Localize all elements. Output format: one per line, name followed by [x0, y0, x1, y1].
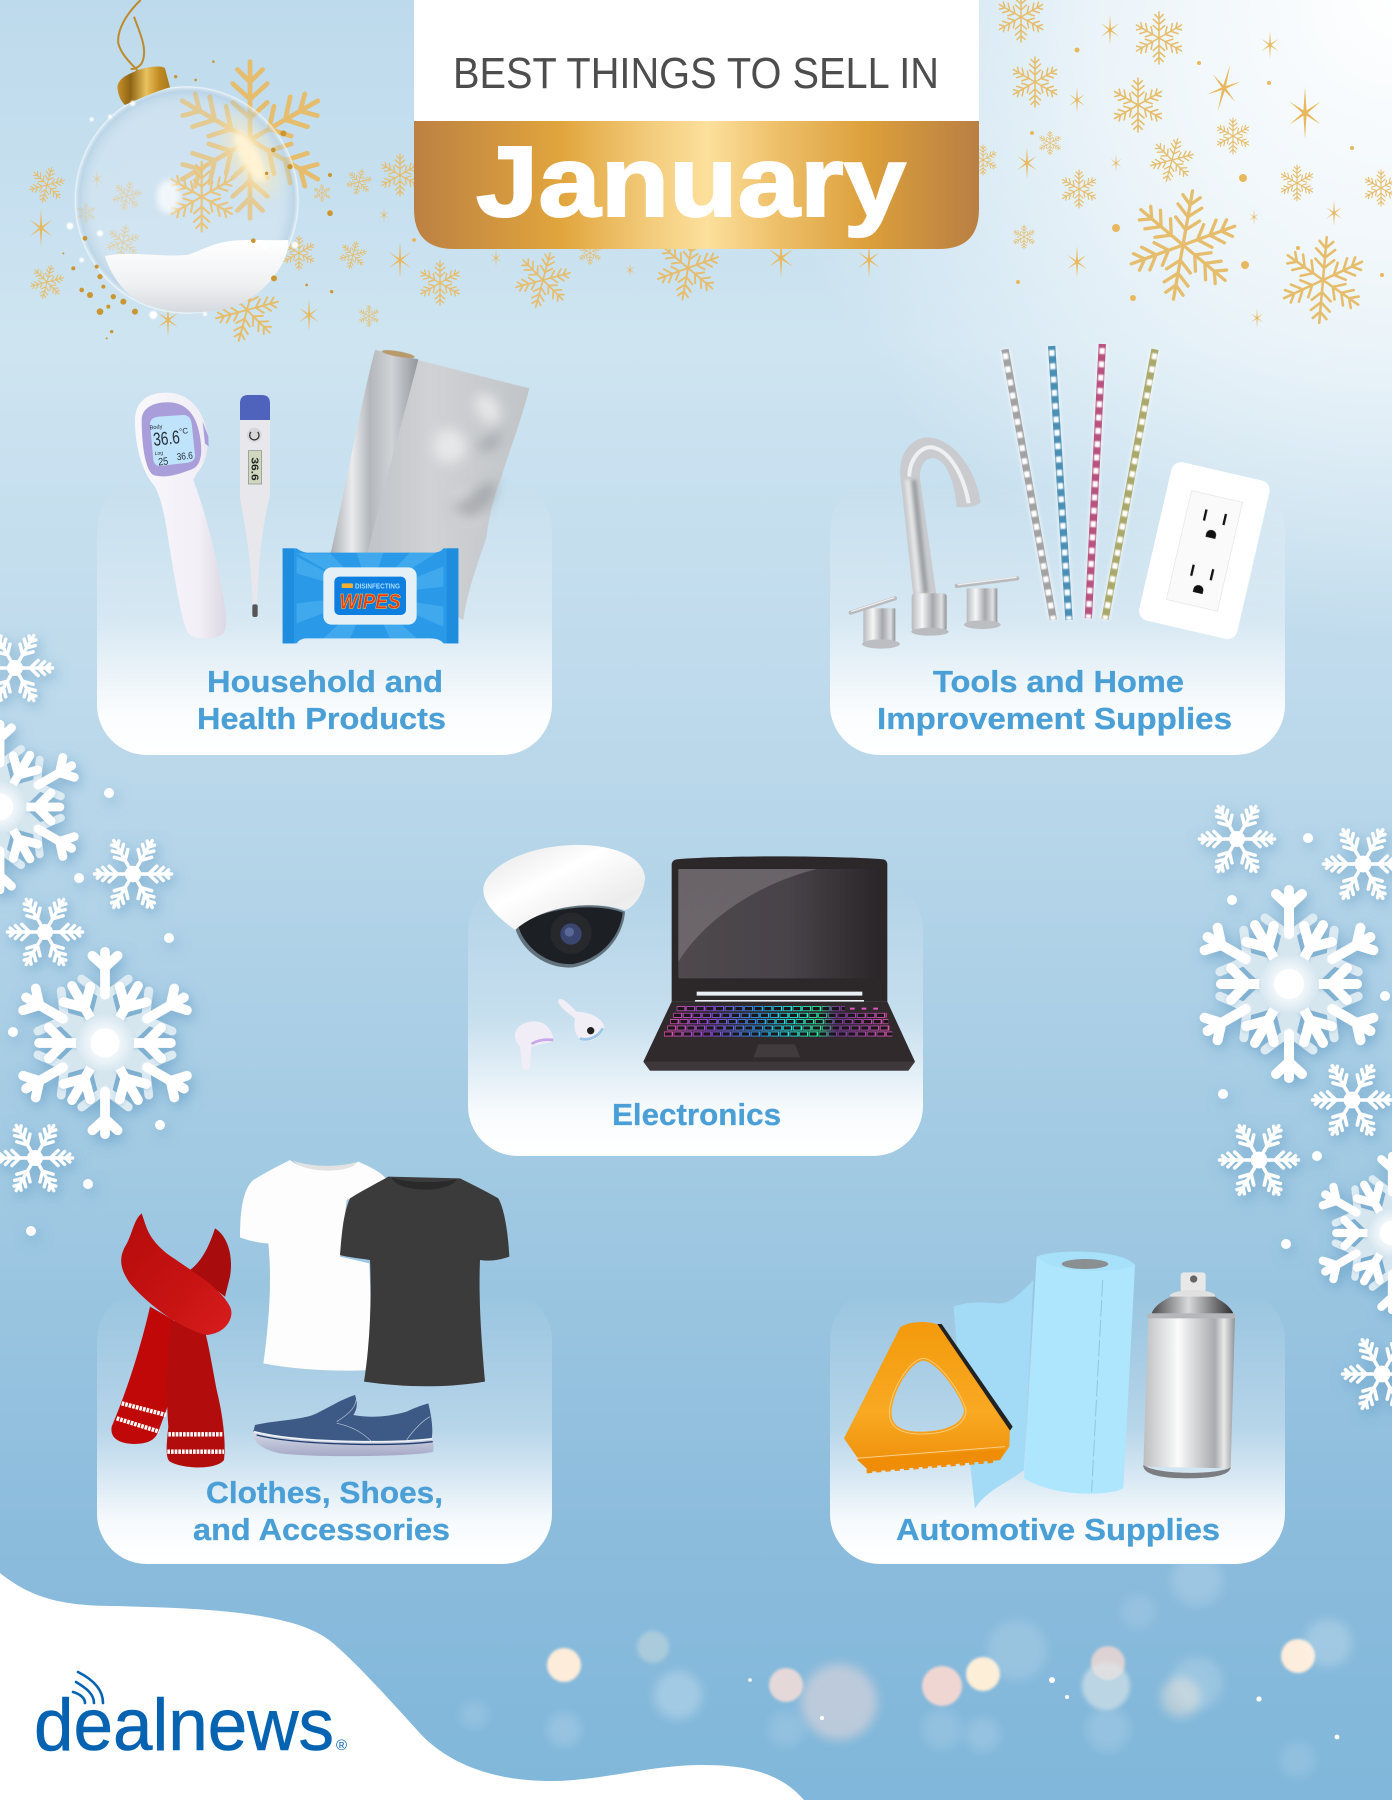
icon: disinfecting wipes pack: [283, 548, 458, 643]
bauble ornament: [62, 0, 333, 339]
icon: infrared thermometer: 25: [158, 456, 169, 468]
product images: [111, 1160, 509, 1467]
icon: black t-shirt: [340, 1177, 509, 1386]
gold confetti: [62, 60, 333, 339]
icon: laptop: [643, 856, 915, 1071]
icon: infrared thermometer: Body: [149, 424, 163, 432]
icon: digital thermometer: 36.6: [249, 457, 260, 481]
label: Health Products: [197, 701, 446, 736]
panel: tools and home improvement supplies: [830, 344, 1285, 755]
icon: infrared thermometer: [135, 393, 226, 639]
product images: [135, 348, 529, 643]
panel: clothes shoes and accessories: [97, 1160, 552, 1564]
icon: faucet: [851, 437, 1017, 649]
product images: [851, 344, 1272, 649]
label: Improvement Supplies: [877, 701, 1232, 736]
panel: electronics: [468, 845, 923, 1156]
label: Household and: [207, 664, 443, 699]
white wave: [0, 1573, 804, 1800]
right snowflakes: [1196, 803, 1392, 1412]
ornament ribbon: [118, 0, 144, 71]
icon: ice scraper: [844, 1322, 1013, 1472]
label: Tools and Home: [933, 664, 1184, 699]
glass globe: [75, 87, 298, 313]
icon: infrared thermometer: Log: [154, 450, 164, 457]
icon: slip-on shoe: [253, 1395, 433, 1456]
signal arcs: [73, 1672, 103, 1703]
icon: digital thermometer: [240, 395, 270, 617]
icon: LED light strips: [1005, 344, 1155, 620]
panel: household and health products: [97, 348, 552, 755]
icon: disinfecting wipes pack: WIPES: [339, 590, 401, 614]
month title: January: [476, 126, 906, 238]
product images: [844, 1252, 1235, 1508]
label: Clothes, Shoes,: [206, 1475, 443, 1510]
icon: paper towel roll: [953, 1252, 1135, 1508]
gold snowflakes and stars: [25, 0, 1392, 349]
registered mark: ®: [336, 1737, 347, 1754]
icon: security camera: [483, 845, 645, 968]
label: Automotive Supplies: [896, 1512, 1220, 1547]
icon: foil roll: [330, 348, 529, 620]
icon: wireless earbuds: [515, 999, 604, 1070]
icon: infrared thermometer: 36.6: [176, 451, 194, 463]
logo: dealnews: dealnews: [34, 1685, 334, 1766]
icon: infrared thermometer: °C: [179, 426, 189, 436]
glitter snowflake behind glass: [230, 59, 320, 188]
title banner: [414, 0, 979, 249]
snow in bauble: [105, 240, 288, 312]
label: Electronics: [612, 1097, 781, 1132]
icon: spray can: [1143, 1272, 1235, 1478]
left snowflakes: [0, 632, 196, 1236]
label: and Accessories: [193, 1512, 450, 1547]
product images: [483, 845, 915, 1071]
icon: white t-shirt: [240, 1160, 387, 1371]
icon: infrared thermometer: 36.6: [152, 426, 181, 450]
icon: disinfecting wipes pack: DISINFECTING: [355, 584, 400, 591]
ornament cap: [117, 67, 170, 105]
title line: BEST THINGS TO SELL IN: [453, 49, 939, 98]
bokeh lights: [460, 1554, 1352, 1778]
panel: automotive supplies: [830, 1252, 1285, 1564]
icon: red scarf: [111, 1213, 231, 1467]
highlight streak: [228, 127, 272, 186]
icon: wall outlet: [1137, 460, 1272, 641]
